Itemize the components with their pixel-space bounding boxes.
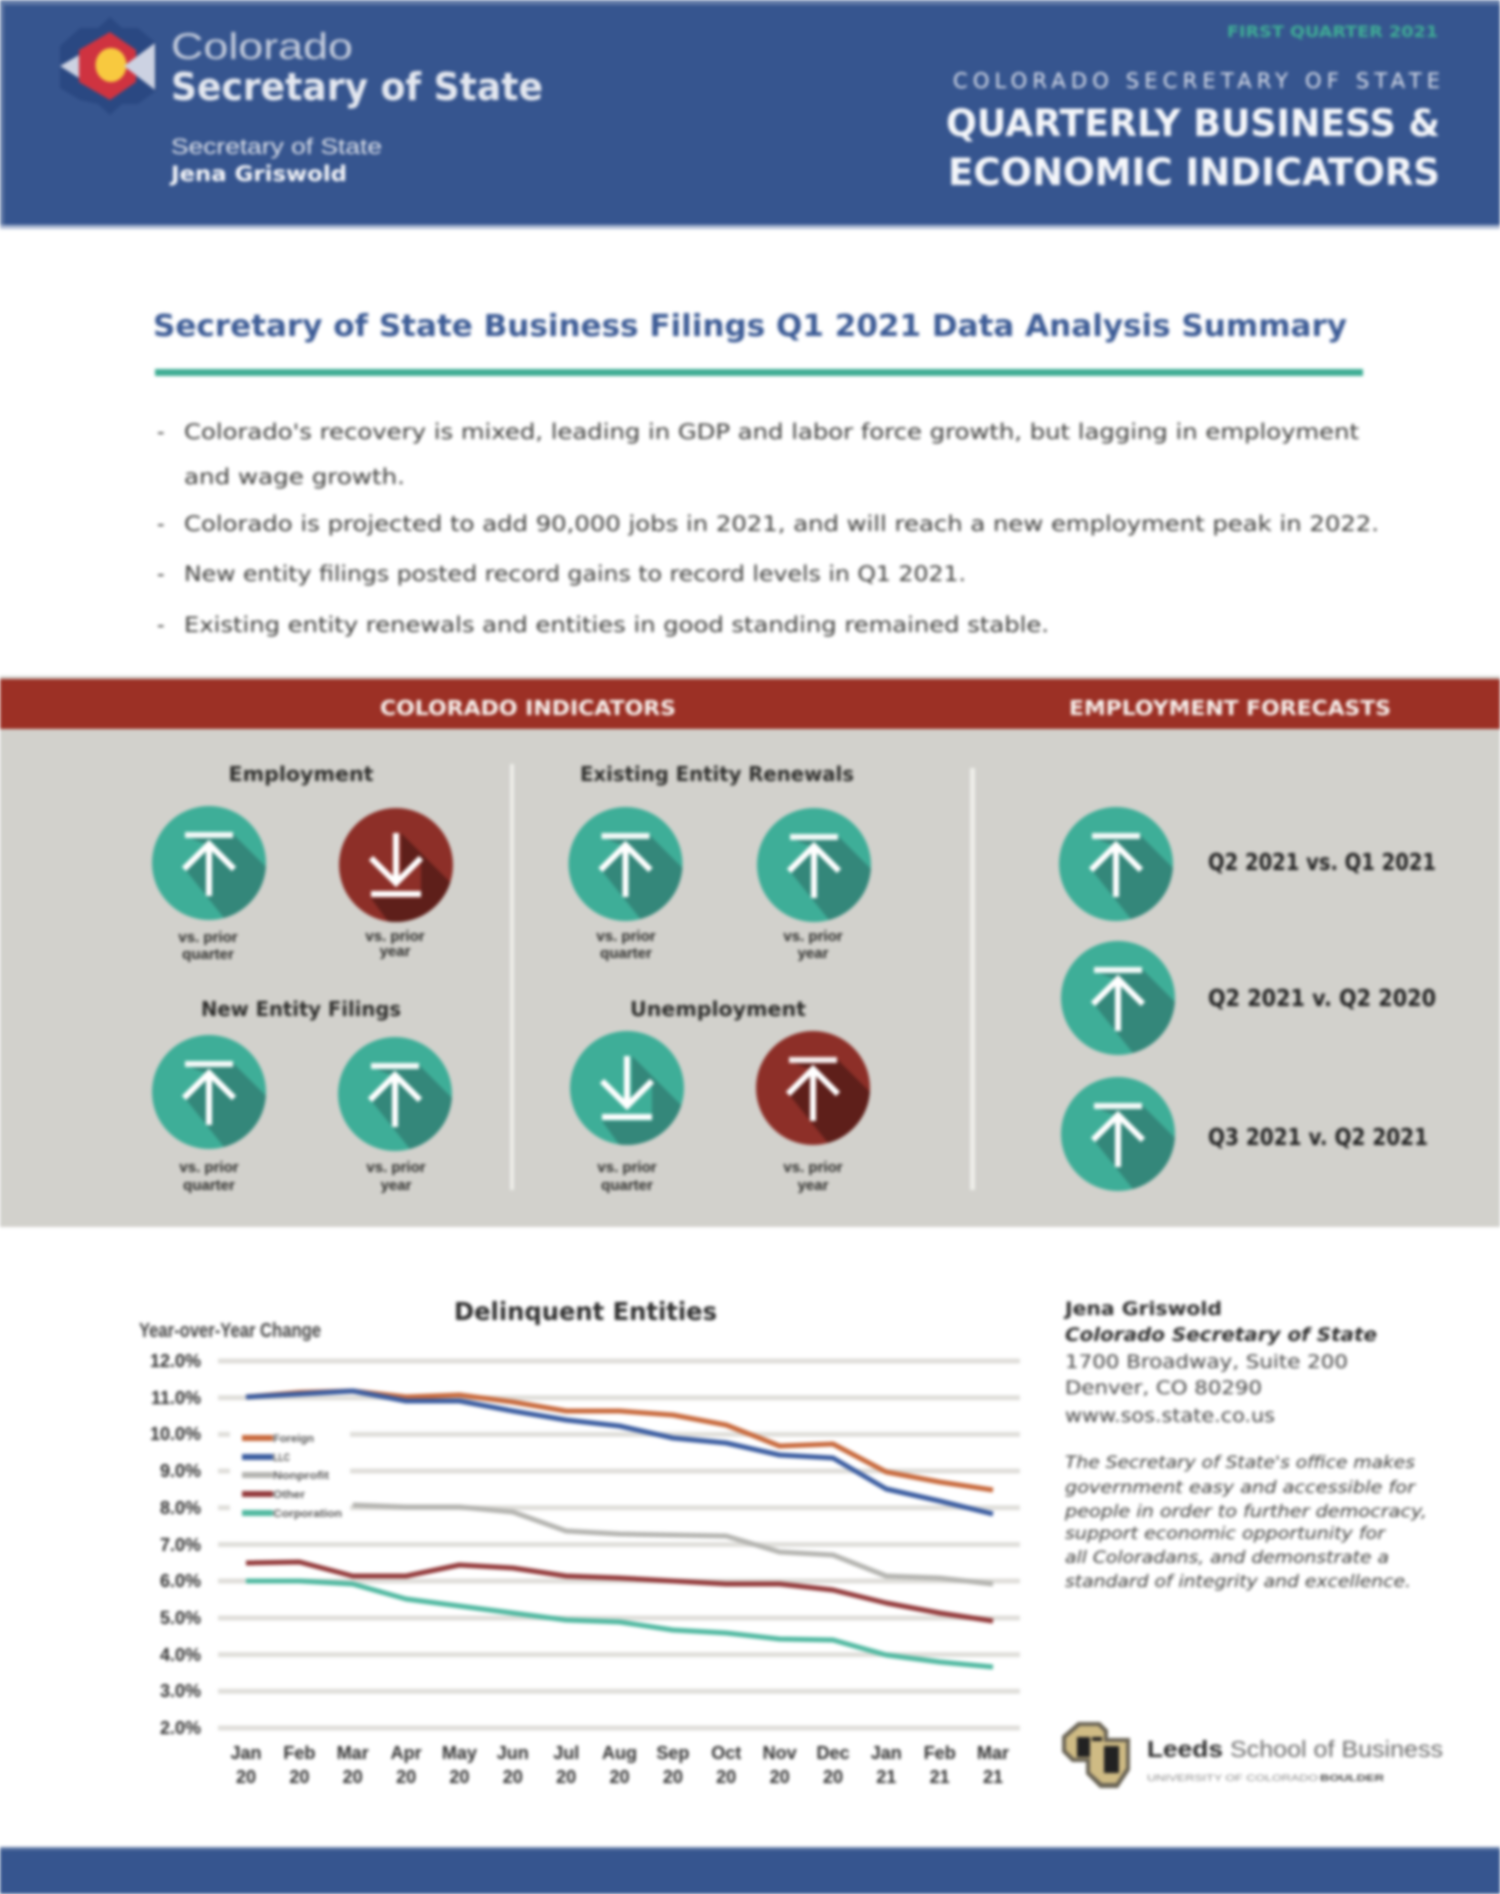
mission statement: people in order to further democracy,	[1064, 1502, 1427, 1522]
x axis labels: Apr	[391, 1743, 422, 1763]
indicator: Unemployment: quarter	[601, 1177, 653, 1194]
indicator: Unemployment	[570, 997, 903, 1194]
mission statement: support economic opportunity for	[1065, 1524, 1386, 1544]
contact block: Colorado Secretary of State	[1065, 1324, 1377, 1346]
summary bullets: -	[157, 613, 165, 637]
x axis labels: Mar	[977, 1743, 1009, 1763]
Leeds School of Business logo	[1062, 1722, 1443, 1788]
x axis labels: 20	[396, 1767, 416, 1787]
contact block: Denver, CO 80290	[1065, 1377, 1262, 1399]
forecast: Q3 2021 v Q2 2021: Q3 2021 v. Q2 2021	[1208, 1125, 1428, 1151]
x axis labels: 20	[609, 1767, 630, 1787]
indicator: Unemployment: Unemployment	[630, 997, 806, 1021]
icon: employment down vs prior year	[339, 808, 466, 960]
x axis labels: Aug	[602, 1743, 637, 1763]
y axis labels: 3.0%	[160, 1681, 201, 1701]
y axis labels: 7.0%	[160, 1535, 201, 1555]
indicators header band	[0, 679, 1500, 729]
forecast: Q3 2021 v Q2 2021	[1061, 1077, 1428, 1229]
x axis labels: Jan	[230, 1743, 262, 1763]
Leeds School of Business logo: Leeds	[1147, 1736, 1223, 1762]
quarter label: FIRST QUARTER 2021	[1227, 22, 1438, 41]
Leeds School of Business logo: School of Business	[1230, 1736, 1443, 1762]
indicators header band: COLORADO INDICATORS	[380, 696, 676, 720]
indicator: Existing Entity Renewals: Existing Entity Renewals	[580, 762, 854, 786]
x axis labels: Mar	[337, 1743, 369, 1763]
line chart: Delinquent Entities	[139, 1297, 1020, 1787]
legend	[230, 1428, 350, 1524]
series: Foreign	[246, 1391, 993, 1490]
y axis labels	[150, 1351, 201, 1738]
indicator: Existing Entity Renewals: year	[798, 945, 829, 962]
x axis labels: 20	[770, 1767, 790, 1787]
x axis labels: 20	[236, 1767, 256, 1787]
contact block: 1700 Broadway, Suite 200	[1065, 1351, 1348, 1373]
x axis labels: Feb	[924, 1743, 956, 1763]
y axis labels: 5.0%	[160, 1608, 201, 1628]
Leeds School of Business logo: BOULDER	[1320, 1773, 1385, 1783]
y axis title: Year-over-Year Change	[139, 1320, 321, 1342]
logo text: Secretary of State: Secretary of State	[171, 65, 543, 109]
indicator: New Entity Filings	[152, 997, 485, 1194]
icon: renewals up vs prior quarter	[568, 807, 716, 959]
legend: Other	[273, 1489, 306, 1501]
x axis labels: Jun	[497, 1743, 529, 1763]
forecast: Q2 2021 v Q2 2020	[1061, 941, 1436, 1093]
legend: LLC	[273, 1452, 290, 1464]
indicator: Unemployment: vs. prior	[783, 1159, 843, 1176]
series: Other	[246, 1562, 993, 1621]
summary bullets: New entity filings posted record gains to record levels in Q1 2021.	[184, 562, 966, 586]
x axis labels: May	[442, 1743, 477, 1763]
x axis labels: Dec	[816, 1743, 850, 1763]
indicators panel	[0, 676, 1500, 1229]
secretary name: Jena Griswold	[169, 162, 347, 186]
report title: ECONOMIC INDICATORS	[948, 151, 1440, 194]
indicator: Existing Entity Renewals: vs. prior	[783, 928, 843, 945]
contact block: Jena Griswold	[1063, 1298, 1222, 1320]
x axis labels: 20	[663, 1767, 683, 1787]
y axis labels: 6.0%	[160, 1571, 201, 1591]
y axis labels: 11.0%	[151, 1388, 201, 1408]
organisation label: COLORADO SECRETARY OF STATE	[953, 69, 1440, 93]
summary bullets: -	[157, 512, 165, 536]
mission statement: The Secretary of State's office makes	[1065, 1453, 1415, 1473]
x axis labels	[230, 1743, 1009, 1787]
summary bullets: Existing entity renewals and entities in good standing remained stable.	[184, 613, 1049, 637]
x axis labels: 20	[343, 1767, 363, 1787]
indicator: Existing Entity Renewals: quarter	[600, 945, 652, 962]
mission statement: government easy and accessible for	[1065, 1478, 1416, 1498]
chart title: Delinquent Entities	[454, 1297, 717, 1326]
y axis labels: 9.0%	[160, 1461, 201, 1481]
indicator: New Entity Filings: year	[381, 1177, 412, 1194]
forecast: Q2 2021 vs Q1 2021: Q2 2021 vs. Q1 2021	[1208, 850, 1436, 876]
icon: Colorado logo	[60, 17, 157, 115]
x axis labels: 21	[876, 1767, 896, 1787]
contact block	[1063, 1298, 1377, 1427]
x axis labels: Feb	[283, 1743, 315, 1763]
summary bullets: -	[157, 562, 165, 586]
series: Corporation	[246, 1581, 993, 1667]
secretary title: Secretary of State	[171, 134, 382, 159]
logo text: Colorado: Colorado	[171, 26, 353, 67]
x axis labels: 21	[983, 1767, 1003, 1787]
report title: QUARTERLY BUSINESS &	[946, 102, 1440, 145]
summary bullets: Colorado is projected to add 90,000 jobs in 2021, and will reach a new employment peak in 2022.	[184, 512, 1379, 536]
indicator: Unemployment: year	[798, 1177, 829, 1194]
legend: Foreign	[273, 1433, 314, 1445]
contact block: www.sos.state.co.us	[1065, 1405, 1275, 1427]
mission statement	[1064, 1453, 1427, 1592]
indicator: Employment: vs. prior	[365, 928, 425, 945]
footer band	[0, 1847, 1500, 1894]
forecast: Q2 2021 v Q2 2020: Q2 2021 v. Q2 2020	[1208, 986, 1436, 1012]
legend: Corporation	[273, 1508, 342, 1520]
y axis labels: 8.0%	[160, 1498, 201, 1518]
x axis labels: Jul	[553, 1743, 579, 1763]
x axis labels: 20	[449, 1767, 469, 1787]
forecast: Q2 2021 vs Q1 2021	[1059, 807, 1436, 959]
y axis labels: 4.0%	[160, 1645, 201, 1665]
legend: Nonprofit	[273, 1470, 329, 1482]
report title	[946, 102, 1440, 194]
summary bullets: -	[157, 420, 165, 444]
x axis labels: Sep	[656, 1743, 689, 1763]
indicator: Unemployment: vs. prior	[597, 1159, 657, 1176]
icon: filings up vs prior year	[338, 1037, 485, 1189]
summary heading: Secretary of State Business Filings Q1 2021 Data Analysis Summary	[153, 309, 1347, 344]
x axis labels: 20	[289, 1767, 309, 1787]
icon: employment up vs prior quarter	[152, 806, 299, 958]
summary bullets	[157, 420, 1379, 637]
icon: filings up vs prior quarter	[152, 1035, 299, 1187]
indicators header band: EMPLOYMENT FORECASTS	[1069, 696, 1391, 720]
x axis labels: 20	[556, 1767, 576, 1787]
series: LLC	[246, 1391, 993, 1514]
mission statement: standard of integrity and excellence.	[1065, 1572, 1411, 1592]
indicator: Employment: quarter	[182, 946, 234, 963]
x axis labels: 20	[823, 1767, 843, 1787]
indicator: Employment: Employment	[228, 762, 374, 786]
icon: CU interlocking mark	[1062, 1722, 1130, 1788]
indicator: New Entity Filings: vs. prior	[366, 1159, 426, 1176]
x axis labels: Nov	[763, 1743, 797, 1763]
icon: renewals up vs prior year	[757, 808, 904, 960]
indicator: New Entity Filings: quarter	[183, 1177, 235, 1194]
employment forecasts	[1059, 807, 1436, 1229]
indicator: New Entity Filings: vs. prior	[179, 1159, 239, 1176]
Leeds School of Business logo: UNIVERSITY OF COLORADO	[1147, 1773, 1318, 1783]
series: Nonprofit	[353, 1505, 993, 1584]
header banner	[0, 0, 1500, 229]
x axis labels: Jan	[871, 1743, 902, 1763]
indicator: Existing Entity Renewals: vs. prior	[596, 928, 656, 945]
indicator: New Entity Filings: New Entity Filings	[201, 997, 401, 1021]
y axis labels: 10.0%	[150, 1424, 201, 1444]
x axis labels: 20	[716, 1767, 736, 1787]
indicator: Existing Entity Renewals	[568, 762, 904, 962]
summary bullets: Colorado's recovery is mixed, leading in GDP and labor force growth, but lagging in employment	[184, 420, 1359, 444]
y axis labels: 2.0%	[160, 1718, 201, 1738]
y axis labels: 12.0%	[150, 1351, 201, 1371]
mission statement: all Coloradans, and demonstrate a	[1065, 1548, 1389, 1568]
indicator: Employment: vs. prior	[178, 929, 238, 946]
x axis labels: 20	[503, 1767, 523, 1787]
summary bullets: and wage growth.	[184, 465, 405, 489]
indicator: Employment: year	[380, 943, 411, 960]
indicator: Employment	[152, 762, 466, 963]
icon: unemployment up vs prior year	[756, 1031, 903, 1183]
x axis labels: 21	[930, 1767, 950, 1787]
icon: unemployment down vs prior quarter	[570, 1031, 697, 1183]
x axis labels: Oct	[711, 1743, 741, 1763]
